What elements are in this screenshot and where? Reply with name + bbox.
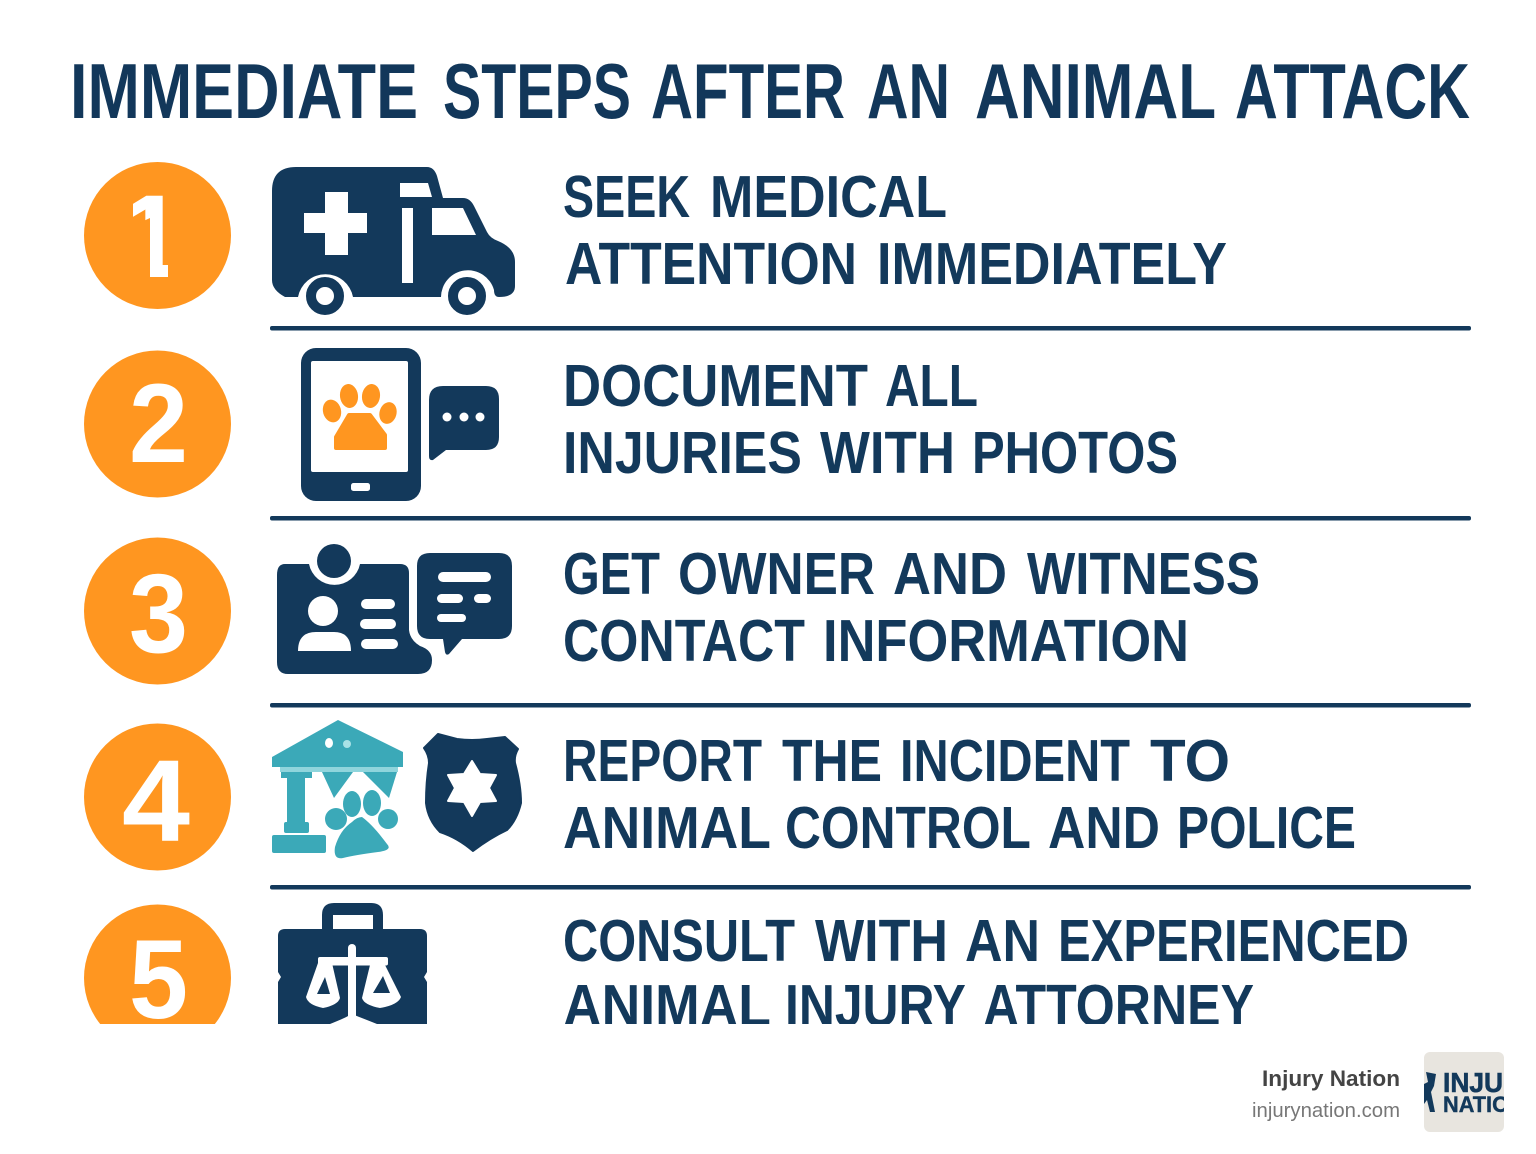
icon: police badge: [424, 734, 521, 851]
title: ANIMAL: [975, 47, 1215, 135]
icon: animal control building with paw: [272, 720, 403, 858]
step 4 text: CONTROL: [785, 795, 1030, 861]
step 3: owner and witness contact info: [84, 538, 1260, 684]
number badge 1: 1: [116, 171, 186, 303]
title: IMMEDIATE: [70, 47, 418, 135]
footer brand name: Injury Nation: [1262, 1066, 1400, 1091]
step 5 text: ATTORNEY: [983, 973, 1254, 1039]
step 3 text: CONTACT: [563, 608, 805, 674]
step 3 text: GET: [563, 541, 660, 607]
title: STEPS: [443, 47, 631, 135]
step 5 text: ANIMAL: [563, 973, 770, 1039]
footer logo: INJU: [1443, 1067, 1503, 1098]
step 1: seek medical attention: [84, 162, 1227, 310]
number badge 2: [84, 350, 231, 498]
footer brand url: injurynation.com: [1252, 1100, 1400, 1122]
step 2 text: PHOTOS: [972, 420, 1178, 486]
step 5 text: WITH: [815, 908, 948, 974]
step 5 text: EXPERIENCED: [1058, 908, 1409, 974]
icon: ambulance: [272, 167, 515, 310]
title: ATTACK: [1235, 47, 1470, 135]
step 2 text: DOCUMENT: [563, 353, 868, 419]
step 3 text: WITNESS: [1027, 541, 1260, 607]
number badge 2: 2: [129, 361, 188, 486]
step 2 text: ALL: [885, 353, 978, 419]
step 4 text: THE: [782, 728, 882, 794]
step 3 text: INFORMATION: [823, 608, 1189, 674]
step 3 text: OWNER: [678, 541, 875, 607]
step 2: document injuries: [84, 348, 1178, 501]
step 5 text: AN: [965, 908, 1040, 974]
step 1 text: IMMEDIATELY: [877, 231, 1227, 297]
step 4 text: INCIDENT: [900, 728, 1130, 794]
step 1 text: ATTENTION: [565, 231, 857, 297]
number badge 4: 4: [122, 736, 190, 866]
number badge 5: 5: [129, 917, 188, 1042]
step 5 text: INJURY: [785, 973, 966, 1039]
step 3 text: [563, 541, 1260, 674]
number badge 3: [84, 538, 231, 684]
step 4 text: AND: [1048, 795, 1160, 861]
footer logo: [1424, 1052, 1509, 1132]
step 4 text: ANIMAL: [563, 795, 770, 861]
step 2 text: INJURIES: [563, 420, 802, 486]
number badge 5: [84, 904, 231, 1024]
step 1 text: MEDICAL: [710, 164, 947, 230]
step 5 text: [565, 919, 1407, 1024]
step 2 text: [563, 353, 1178, 486]
icon: id card and message bubble: [277, 544, 512, 674]
number badge 3: 3: [129, 551, 188, 676]
footer logo: NATIO: [1443, 1092, 1509, 1117]
step 2 text: WITH: [820, 420, 955, 486]
number badge 4: [84, 724, 231, 870]
icon: briefcase with scales of justice: [278, 903, 427, 1024]
step 4 text: POLICE: [1177, 795, 1356, 861]
icon: tablet with paw and chat bubble: [301, 348, 499, 501]
title: AFTER: [651, 47, 845, 135]
title: AN: [867, 47, 950, 135]
step 4 text: REPORT: [563, 728, 762, 794]
number badge 1: [84, 162, 231, 309]
step 5 text: CONSULT: [563, 908, 795, 974]
step 5: consult an attorney: [84, 903, 1407, 1024]
step 1 text: SEEK: [563, 164, 690, 230]
step 1 text: [563, 164, 1227, 297]
step 4 text: [563, 728, 1356, 861]
step 4: report the incident: [84, 720, 1356, 870]
step 3 text: AND: [893, 541, 1007, 607]
step 4 text: TO: [1150, 728, 1230, 794]
